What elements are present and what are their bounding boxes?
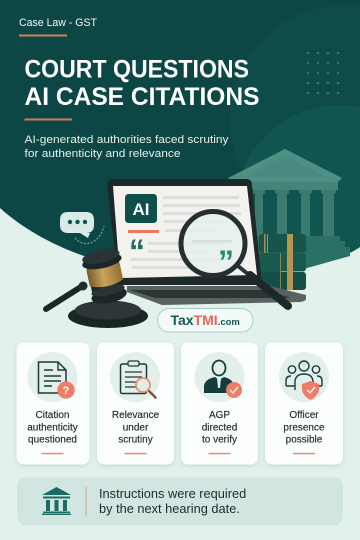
card: AGP [181, 342, 258, 464]
category label [19, 17, 98, 36]
card: officer presence [265, 342, 343, 464]
TaxTMI logo pill: TaxTMI.com [170, 312, 240, 328]
banner text: by the next hearing date. [99, 501, 240, 516]
title underline [24, 118, 72, 120]
icon: document question: ? [63, 385, 70, 397]
subtitle: AI-generated authorities faced scrutiny [24, 134, 229, 146]
background [0, 0, 360, 272]
card: relevance [97, 342, 174, 464]
title: AI CASE CITATIONS [24, 83, 260, 111]
building illustration [228, 149, 350, 272]
card: citation authenticity [16, 342, 90, 464]
red accent bar [128, 230, 159, 233]
subtitle: for authenticity and relevance [24, 148, 180, 160]
magnifying glass [181, 212, 288, 306]
label: directed [202, 422, 237, 434]
title: COURT QUESTIONS [24, 56, 249, 84]
icon: clipboard magnifier [120, 361, 156, 398]
label: scrutiny [118, 434, 153, 446]
dot grid decoration [307, 52, 339, 94]
icon: courthouse [42, 487, 71, 515]
label: Relevance [112, 410, 160, 421]
icon: group with shield [286, 361, 322, 400]
document lines [131, 196, 241, 269]
subtitle [24, 134, 229, 160]
gavel [46, 246, 148, 328]
label: questioned [28, 434, 77, 446]
AI badge [125, 194, 157, 223]
speech bubble [60, 212, 104, 244]
icon: officer with check [204, 360, 242, 398]
label: authenticity [27, 422, 78, 434]
label: Citation [36, 410, 69, 421]
label: Officer [289, 410, 319, 421]
magnifying glass: ” [218, 244, 234, 280]
category label: Case Law - GST [19, 17, 98, 29]
label: AGP [209, 410, 230, 421]
AI badge: AI [132, 200, 150, 219]
laptop [107, 179, 306, 305]
label: to verify [202, 434, 237, 446]
TaxTMI logo pill [158, 308, 253, 332]
label: under [123, 422, 149, 434]
law books [259, 234, 306, 290]
label: possible [286, 434, 323, 446]
opening quote: “ [129, 233, 145, 269]
bottom banner [17, 478, 343, 525]
label: presence [283, 422, 325, 434]
title [24, 56, 260, 111]
banner text: Instructions were required [99, 486, 246, 501]
